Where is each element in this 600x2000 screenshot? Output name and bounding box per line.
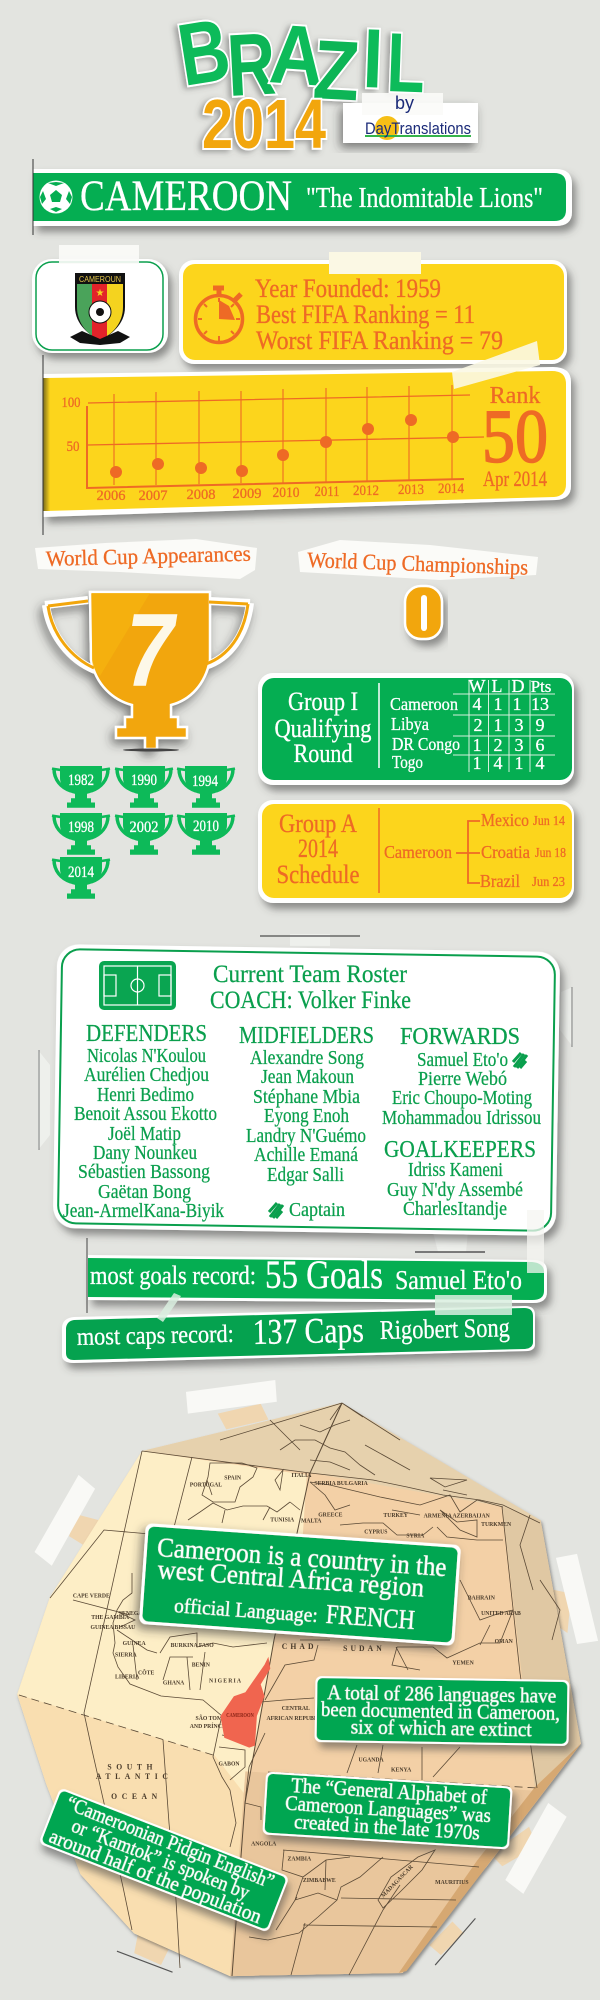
callout: country and official language: Cameroon is a country in the bbox=[156, 1532, 448, 1582]
table: group standings: 1 bbox=[472, 735, 482, 755]
icon: football pitch bbox=[99, 961, 176, 1010]
chart axis labels: 2006 bbox=[96, 488, 126, 504]
column: midfielders: Jean Makoun bbox=[261, 1066, 354, 1088]
callout: country and official language: official Language: bbox=[173, 1593, 319, 1627]
banner: most goals record: 55 Goals bbox=[265, 1252, 383, 1297]
callout: country and official language bbox=[139, 1523, 461, 1646]
trophy 1982 bbox=[52, 766, 110, 808]
map labels: GREECE bbox=[318, 1512, 343, 1518]
schedule bracket: Jun 18 bbox=[535, 846, 566, 861]
map labels: YEMEN bbox=[452, 1661, 475, 1667]
trophy 2002 bbox=[115, 813, 173, 855]
map lines bbox=[19, 1403, 560, 1976]
map labels: AFRICAN REPUBLIC bbox=[266, 1716, 324, 1722]
map labels: SYRIA bbox=[406, 1533, 425, 1539]
map globe bbox=[17, 1380, 598, 1976]
table: group standings: D bbox=[512, 676, 524, 696]
banner: Cameroon The Indomitable Lions: "The Indomitable Lions" bbox=[306, 183, 543, 214]
table: group standings: 6 bbox=[536, 735, 544, 755]
map labels: MADAGASCAR bbox=[381, 1864, 415, 1899]
map labels: CYPRUS bbox=[364, 1529, 388, 1535]
icon: Cameroon crest bbox=[70, 273, 130, 345]
trophy 2002: 2002 bbox=[130, 819, 158, 836]
map labels: SUDAN bbox=[343, 1644, 385, 1653]
table: group standings: 1 bbox=[494, 694, 502, 714]
map labels: THE GAMBIA bbox=[91, 1615, 130, 1621]
title: Brazil 2014: I bbox=[361, 11, 385, 106]
globe faces bbox=[17, 1403, 581, 1976]
panel: Group A 2014 schedule bbox=[258, 800, 574, 903]
trophy 2014: 2014 bbox=[68, 864, 94, 881]
callout: 286 languages: A total of 286 languages have bbox=[327, 1680, 556, 1708]
map labels: KENYA bbox=[391, 1767, 412, 1773]
schedule bracket: Croatia bbox=[481, 842, 530, 862]
map labels: BENIN bbox=[192, 1663, 211, 1669]
chart axis labels: 100 bbox=[62, 395, 80, 411]
column: defenders: Joël Matip bbox=[108, 1123, 181, 1145]
trophy 2010: 2010 bbox=[193, 818, 219, 835]
chart axis labels: 2014 bbox=[438, 481, 464, 497]
legend: captain bbox=[269, 1199, 345, 1221]
callout: Pidgin English: “Cameroonian Pidgin English” bbox=[63, 1791, 278, 1893]
heading: Group I Qualifying Round bbox=[274, 687, 372, 768]
column: defenders: Sébastien Bassong bbox=[78, 1161, 210, 1183]
map labels: CÔTE bbox=[138, 1668, 154, 1677]
chart axis labels: 2007 bbox=[138, 488, 168, 504]
column: forwards: Mohammadou Idrissou bbox=[382, 1107, 541, 1129]
column: forwards: Samuel Eto'o bbox=[417, 1049, 508, 1071]
map labels: GUINEA bbox=[123, 1641, 146, 1647]
trophy 1990: 1990 bbox=[131, 772, 157, 789]
logo: Day Translations: by bbox=[395, 93, 414, 113]
roster heading: COACH: Volker Finke bbox=[210, 987, 411, 1014]
map labels: TURKMEN bbox=[481, 1522, 512, 1528]
map labels: UGANDA bbox=[358, 1757, 384, 1763]
chart axis labels bbox=[62, 395, 464, 504]
map labels: BAHRAIN bbox=[468, 1595, 496, 1601]
map labels: GHANA bbox=[163, 1680, 185, 1686]
callout: 286 languages: been documented in Cameroon, bbox=[321, 1697, 560, 1725]
map labels: ZAMBIA bbox=[288, 1856, 312, 1862]
panel: crest bbox=[32, 245, 168, 353]
heading: Group A 2014 Schedule: Group A bbox=[279, 809, 357, 838]
banner: most caps record: Rigobert Song bbox=[379, 1312, 510, 1345]
banner: most caps record: 137 Caps bbox=[252, 1310, 364, 1352]
callout: General Alphabet bbox=[262, 1772, 513, 1849]
chart axis labels: 2010 bbox=[272, 485, 300, 501]
column: midfielders: Edgar Salli bbox=[267, 1164, 344, 1186]
column: defenders: Aurélien Chedjou bbox=[84, 1064, 209, 1086]
column: goalkeepers: Idriss Kameni bbox=[408, 1159, 503, 1181]
map labels: CENTRAL bbox=[282, 1706, 310, 1712]
small trophies: appearance years bbox=[52, 766, 235, 899]
title: Brazil 2014: Z bbox=[311, 22, 362, 118]
heading: Group A 2014 Schedule: 2014 bbox=[298, 834, 338, 863]
column: midfielders: Stéphane Mbia bbox=[253, 1086, 360, 1108]
panel: FIFA ranking chart bbox=[43, 341, 571, 535]
map labels: CAPE VERDE bbox=[73, 1593, 110, 1599]
callout: General Alphabet: Cameroon Languages” was bbox=[285, 1791, 492, 1827]
schedule bracket bbox=[384, 810, 566, 891]
map labels: OCEAN bbox=[111, 1792, 162, 1801]
column: defenders: DEFENDERS bbox=[86, 1021, 207, 1047]
table: group standings: 13 bbox=[531, 694, 549, 714]
map labels: TURKEY bbox=[383, 1513, 409, 1519]
stat lines bbox=[255, 274, 503, 355]
map labels bbox=[73, 1473, 521, 1899]
icon: gold trophy with 7: 7 bbox=[126, 593, 177, 709]
column: forwards: FORWARDS bbox=[400, 1024, 520, 1050]
map labels: ATLANTIC bbox=[96, 1772, 172, 1781]
heading: Group A 2014 Schedule: Schedule bbox=[276, 860, 360, 889]
icon: stopwatch bbox=[196, 288, 242, 342]
title: Brazil 2014: L bbox=[385, 15, 427, 110]
map labels: UNITED ARAB bbox=[481, 1611, 521, 1617]
number: zero championships bbox=[405, 586, 442, 639]
table: group standings: DR Congo bbox=[392, 734, 460, 754]
callout: 286 languages: six of which are extinct bbox=[351, 1715, 532, 1741]
chart axis labels: 50 bbox=[66, 439, 80, 455]
table: group standings: 4 bbox=[494, 753, 502, 773]
stat lines: Worst FIFA Ranking = 79 bbox=[256, 326, 503, 355]
table: group standings: L bbox=[492, 676, 502, 696]
banner: Cameroon The Indomitable Lions bbox=[33, 159, 572, 235]
title: Brazil 2014: R bbox=[225, 14, 278, 115]
map labels: ANGOLA bbox=[251, 1842, 277, 1848]
map labels: MALTA bbox=[301, 1518, 322, 1524]
table: group standings: 3 bbox=[514, 735, 524, 755]
column: forwards: Eric Choupo-Moting bbox=[392, 1087, 532, 1109]
Cameroon highlighted bbox=[220, 1657, 270, 1748]
callout: Pidgin English bbox=[39, 1786, 290, 1933]
banner: most goals record bbox=[87, 1210, 547, 1313]
column: midfielders: MIDFIELDERS bbox=[239, 1023, 374, 1049]
callout: General Alphabet: created in the late 1970s bbox=[293, 1809, 481, 1845]
map labels: ZIMBABWE bbox=[303, 1878, 336, 1884]
map labels: SOUTH bbox=[107, 1762, 157, 1771]
map labels: ITALIA bbox=[291, 1473, 312, 1479]
callout: 286 languages bbox=[314, 1676, 570, 1746]
callout: Pidgin English: or “Kamtok” is spoken by bbox=[68, 1813, 254, 1904]
label: World Cup Appearances: World Cup Appearances bbox=[45, 541, 251, 571]
column: goalkeepers: GOALKEEPERS bbox=[384, 1137, 536, 1163]
map labels: LIBERIA bbox=[115, 1674, 140, 1680]
map labels: SIERRA bbox=[115, 1653, 137, 1659]
panel: Group I qualifying round bbox=[258, 673, 574, 785]
current rank: 50 bbox=[482, 395, 548, 479]
Cameroon highlighted: CAMEROON bbox=[226, 1713, 254, 1719]
table: group standings: Pts bbox=[531, 677, 551, 696]
column: goalkeepers bbox=[384, 1137, 536, 1220]
schedule bracket: Jun 14 bbox=[533, 814, 565, 829]
column: forwards bbox=[382, 1024, 541, 1129]
schedule bracket: Brazil bbox=[480, 871, 520, 891]
map labels: AND PRÍNCIPE bbox=[190, 1722, 231, 1730]
line chart bbox=[87, 385, 484, 488]
panel: current team roster bbox=[38, 934, 573, 1252]
table: group standings: 1 bbox=[472, 753, 482, 773]
icon: Cameroon crest: CAMEROUN bbox=[79, 275, 121, 284]
banner: most goals record: Samuel Eto'o bbox=[395, 1265, 522, 1295]
map labels: SENEGAL bbox=[119, 1611, 146, 1617]
column: midfielders bbox=[239, 1023, 374, 1186]
table: group standings: 2 bbox=[474, 715, 482, 735]
column: defenders: Benoit Assou Ekotto bbox=[74, 1103, 217, 1125]
banner: most caps record: most caps record: bbox=[77, 1321, 234, 1351]
table: group standings bbox=[390, 676, 555, 773]
column: midfielders: Landry N'Guémo bbox=[246, 1125, 366, 1147]
column: goalkeepers: Guy N'dy Assembé bbox=[387, 1179, 523, 1201]
current rank: Apr 2014 bbox=[483, 466, 547, 491]
icon: gold trophy with 7 bbox=[45, 592, 250, 752]
column: defenders bbox=[63, 1021, 224, 1222]
column: defenders: Dany Nounkeu bbox=[93, 1142, 197, 1164]
trophy 1998 bbox=[52, 813, 110, 855]
column: forwards: Pierre Webó bbox=[418, 1068, 507, 1090]
trophy 1998: 1998 bbox=[68, 819, 94, 836]
stat lines: Year Founded: 1959 bbox=[255, 274, 441, 303]
icon: Cameroon crest: ★ bbox=[96, 288, 105, 299]
chart axis labels: 2011 bbox=[314, 484, 340, 500]
map labels: SPAIN bbox=[224, 1476, 242, 1482]
callout: country and official language: west Central Africa region bbox=[157, 1554, 426, 1603]
schedule bracket: Mexico bbox=[481, 810, 529, 830]
current rank bbox=[482, 383, 548, 491]
label: World Cup Championships: World Cup Championships bbox=[307, 547, 529, 580]
table: group standings: 4 bbox=[536, 753, 544, 773]
tape tabs bbox=[35, 1380, 598, 1972]
stat lines: Best FIFA Ranking = 11 bbox=[256, 300, 475, 329]
trophy 1994: 1994 bbox=[192, 773, 218, 790]
map labels: CHAD bbox=[282, 1642, 317, 1651]
map labels: SÃO TOMÉ bbox=[196, 1714, 226, 1722]
column: goalkeepers: CharlesItandje bbox=[403, 1198, 507, 1220]
table: group standings: W bbox=[468, 676, 486, 696]
roster heading: Current Team Roster bbox=[213, 961, 408, 988]
table: group standings: 1 bbox=[494, 715, 502, 735]
map labels: BURKINA FASO bbox=[171, 1643, 214, 1649]
table: group standings: 4 bbox=[472, 694, 482, 714]
column: midfielders: Achille Emaná bbox=[254, 1144, 358, 1166]
chart axis labels: 2013 bbox=[398, 482, 424, 498]
callout: Pidgin English: around half of the population bbox=[46, 1824, 266, 1928]
roster heading bbox=[210, 961, 411, 1014]
banner: Cameroon The Indomitable Lions: CAMEROON bbox=[80, 173, 292, 220]
title: Brazil 2014: B bbox=[171, 0, 236, 105]
callout: country and official language: FRENCH bbox=[325, 1599, 416, 1635]
map labels: MAURITIUS bbox=[435, 1880, 469, 1886]
logo: Day Translations bbox=[343, 93, 478, 143]
column: defenders: Nicolas N'Koulou bbox=[87, 1045, 206, 1067]
title: Brazil 2014: 2014 bbox=[202, 85, 326, 163]
banner: most goals record: most goals record: bbox=[90, 1261, 256, 1290]
map labels: PORTUGAL bbox=[190, 1483, 222, 1489]
map labels: GABON bbox=[219, 1761, 240, 1767]
heading: Group A 2014 Schedule bbox=[276, 809, 360, 889]
table: group standings: Cameroon bbox=[390, 694, 458, 714]
trophy 2010 bbox=[177, 813, 235, 855]
callout: General Alphabet: The “General Alphabet of bbox=[291, 1773, 488, 1809]
title: Brazil 2014 bbox=[171, 0, 427, 163]
table: group standings: Libya bbox=[391, 714, 429, 734]
schedule bracket: Jun 23 bbox=[532, 875, 565, 890]
chart axis labels: 2008 bbox=[186, 487, 216, 503]
column: defenders: Gaëtan Bong bbox=[98, 1181, 191, 1203]
table: group standings: 3 bbox=[514, 715, 524, 735]
table: group standings: 2 bbox=[494, 735, 502, 755]
table: group standings: 1 bbox=[512, 694, 522, 714]
map labels: NIGERIA bbox=[209, 1678, 242, 1684]
current rank: Rank bbox=[490, 383, 540, 409]
map labels: TUNISIA bbox=[270, 1517, 295, 1524]
icon: soccer ball bbox=[40, 180, 72, 214]
chart axis labels: 2009 bbox=[232, 486, 262, 502]
column: defenders: Jean-ArmelKana-Biyik bbox=[63, 1200, 224, 1222]
chart axis labels: 2012 bbox=[353, 483, 379, 499]
table: group standings: 9 bbox=[536, 715, 544, 735]
heading: Group I Qualifying Round: Round bbox=[294, 739, 352, 768]
column: defenders: Henri Bedimo bbox=[97, 1084, 194, 1106]
table: group standings: Togo bbox=[392, 752, 423, 772]
map labels: OMAN bbox=[495, 1639, 514, 1645]
column: midfielders: Alexandre Song bbox=[250, 1047, 364, 1069]
trophy 1990 bbox=[115, 766, 173, 808]
column: midfielders: Eyong Enoh bbox=[264, 1105, 349, 1127]
logo: Day Translations: DayTranslations bbox=[365, 119, 471, 138]
trophy 1982: 1982 bbox=[68, 772, 94, 789]
banner: most caps record bbox=[62, 1293, 535, 1363]
trophy 1994 bbox=[177, 766, 235, 808]
table: group standings: 1 bbox=[514, 753, 524, 773]
heading: Group I Qualifying Round: Qualifying bbox=[274, 714, 372, 743]
panel: team facts bbox=[179, 252, 567, 364]
schedule bracket: Cameroon bbox=[384, 842, 452, 862]
title: Brazil 2014: A bbox=[267, 6, 327, 104]
map labels: SERBIA BULGARIA bbox=[314, 1481, 369, 1487]
map labels: GUINEA BISSAU bbox=[90, 1625, 136, 1631]
map labels: ARMENIA AZERBAIJAN bbox=[424, 1514, 491, 1520]
heading: Group I Qualifying Round: Group I bbox=[288, 687, 358, 716]
legend: captain: Captain bbox=[289, 1199, 345, 1221]
trophy 2014 bbox=[52, 857, 110, 899]
